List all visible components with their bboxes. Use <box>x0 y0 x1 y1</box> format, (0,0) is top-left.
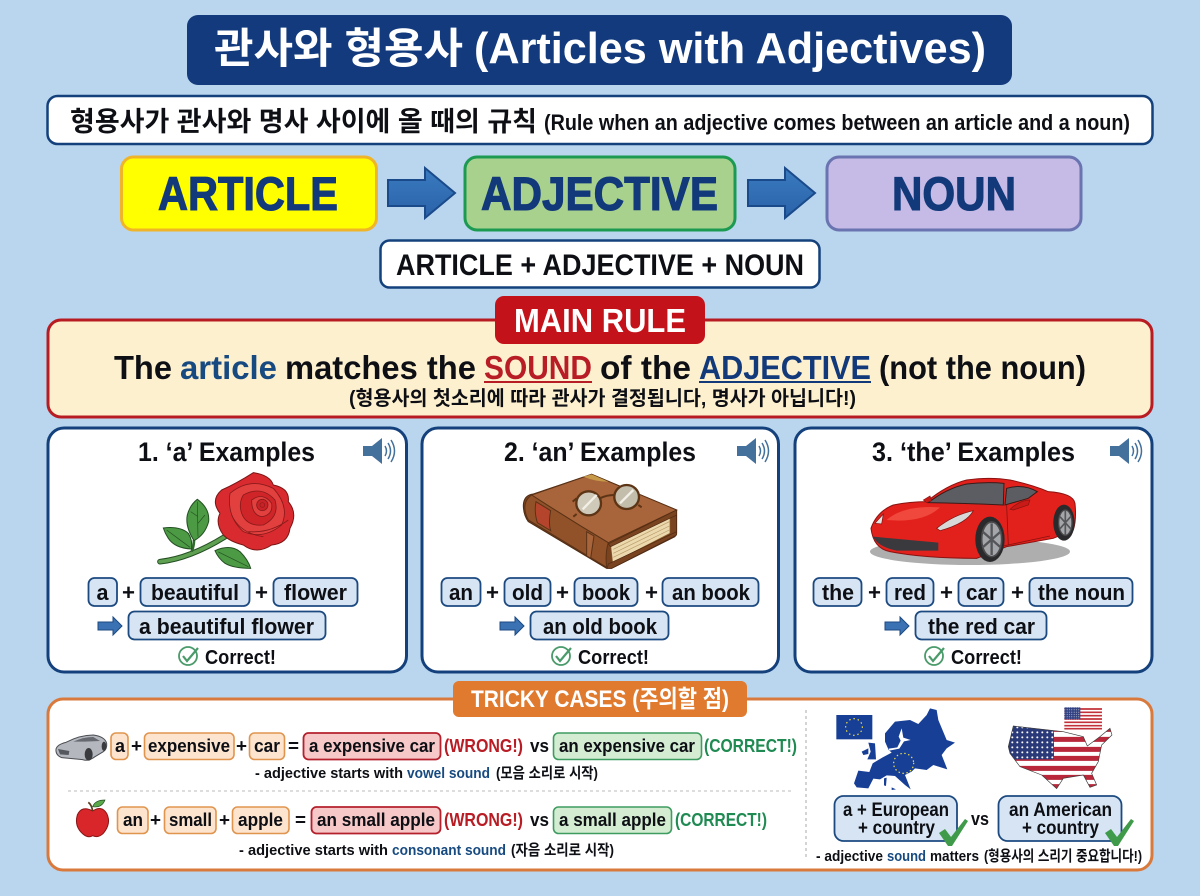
note row 1: vowel sound <box>407 765 490 782</box>
equation pills: red <box>894 580 926 605</box>
flow diagram: article adjective noun <box>122 157 1081 230</box>
panel: a examples <box>48 428 406 672</box>
equation pills: + <box>486 580 499 605</box>
note: sound matters: (형용사의 스리기 중요합니다!) <box>984 848 1142 865</box>
example row 1: + <box>236 736 247 756</box>
equation pills: + <box>1011 580 1024 605</box>
icon: speaker <box>1110 438 1142 464</box>
box: an American country <box>998 796 1122 841</box>
example row 2: apple <box>238 810 283 830</box>
article box <box>122 157 376 230</box>
subtitle: rule description: (Rule when an adjective comes between an article and a noun) <box>544 110 1130 135</box>
equation pills: the noun <box>1038 580 1125 605</box>
heading: 3. ‘the’ Examples <box>872 437 1075 467</box>
subtitle: rule description <box>48 96 1152 144</box>
adjective box <box>465 157 735 230</box>
main rule sentence: SOUND <box>484 349 592 386</box>
example row 2: a small apple <box>559 810 666 830</box>
example row 1: = <box>288 736 299 756</box>
correct <box>925 647 1022 669</box>
icon: red sports car <box>870 478 1076 565</box>
main rule sentence: article <box>180 349 277 386</box>
example row 1: (CORRECT!) <box>704 736 797 756</box>
result <box>885 612 1046 640</box>
note row 1: - adjective starts with <box>255 765 403 782</box>
example row 2: + <box>150 810 161 830</box>
vs: vs <box>971 809 989 829</box>
equation pills: flower <box>284 580 347 605</box>
title <box>187 15 1012 85</box>
example row 2: small <box>169 810 212 830</box>
noun box: NOUN <box>892 167 1016 220</box>
icon: speaker <box>737 438 768 464</box>
icon: gray car <box>56 735 107 761</box>
equation pills: + <box>122 580 135 605</box>
icon: rose <box>160 473 294 568</box>
box: an American country: an American <box>1009 800 1112 821</box>
arrow: article to adjective <box>388 168 455 218</box>
arrow: adjective to noun <box>748 168 815 218</box>
icon: old book and glasses <box>523 474 677 568</box>
note row 1 <box>255 765 598 782</box>
icon: EU flag and Europe map <box>836 708 955 790</box>
article box: ARTICLE <box>158 167 338 220</box>
box: a European country: + country <box>858 818 935 839</box>
adjective box: ADJECTIVE <box>481 167 718 220</box>
equation pills: + <box>940 580 953 605</box>
box: an American country: + country <box>1022 818 1099 839</box>
example row 1 <box>111 733 797 760</box>
main rule sentence: matches the <box>285 349 476 386</box>
equation pills: an book <box>672 580 751 605</box>
example row 1: + <box>131 736 142 756</box>
note: sound matters: matters <box>930 848 979 865</box>
main rule sentence: ADJECTIVE <box>699 349 871 386</box>
icon: green check <box>939 819 968 846</box>
main rule sentence: of the <box>600 349 691 386</box>
equation pills: old <box>512 580 543 605</box>
formula: ARTICLE + ADJECTIVE + NOUN <box>396 249 804 282</box>
panel: main rule <box>48 296 1152 417</box>
title: (Articles with Adjectives) <box>474 24 986 73</box>
example row 2: + <box>219 810 230 830</box>
noun box <box>827 157 1081 230</box>
note row 2: (자음 소리로 시작) <box>511 842 614 859</box>
example row 2 <box>118 807 767 834</box>
note row 1: (모음 소리로 시작) <box>496 765 598 782</box>
equation pills: + <box>556 580 569 605</box>
equation pills: + <box>255 580 268 605</box>
example row 2: vs <box>530 810 549 830</box>
correct: Correct! <box>205 647 276 669</box>
example row 2: an small apple <box>317 810 435 830</box>
correct: Correct! <box>578 647 649 669</box>
main rule Korean note: (형용사의 첫소리에 따라 관사가 결정됩니다, 명사가 아닙니다!) <box>349 387 856 410</box>
equation pills: a <box>96 580 109 605</box>
example row 1: expensive <box>148 736 230 756</box>
note: sound matters: sound <box>887 848 926 865</box>
example row 1: a expensive car <box>309 736 435 756</box>
icon: US flag and USA map <box>1007 707 1113 790</box>
equation pills: car <box>966 580 997 605</box>
correct <box>552 647 649 669</box>
correct: Correct! <box>951 647 1022 669</box>
result: a beautiful flower <box>139 614 314 639</box>
icon: green check <box>1105 819 1134 846</box>
equation pills: the <box>822 580 854 605</box>
heading: 1. ‘a’ Examples <box>138 437 315 467</box>
equation pills <box>88 578 358 606</box>
tricky cases tab <box>453 681 747 717</box>
note row 2: consonant sound <box>392 842 506 859</box>
title: 관사와 형용사 <box>214 25 463 72</box>
subtitle: rule description: 형용사가 관사와 명사 사이에 올 때의 규칙 <box>70 107 537 137</box>
equation pills: an <box>449 580 473 605</box>
example row 1: car <box>254 736 280 756</box>
main rule sentence: The <box>114 349 172 386</box>
equation pills: book <box>582 580 631 605</box>
example row 1: a <box>115 736 126 756</box>
equation pills: + <box>868 580 881 605</box>
example row 2: an <box>123 810 143 830</box>
panel: an examples <box>422 428 778 672</box>
result: an old book <box>543 614 658 639</box>
result <box>500 612 668 640</box>
equation pills: beautiful <box>151 580 239 605</box>
main rule tab: MAIN RULE <box>514 302 686 339</box>
example row 2: = <box>295 810 306 830</box>
formula <box>380 240 820 288</box>
example row 2: (CORRECT!) <box>675 810 767 830</box>
example row 1: an expensive car <box>559 736 695 756</box>
result: the red car <box>928 614 1035 639</box>
equation pills <box>814 578 1132 606</box>
tricky cases tab: TRICKY CASES (주의할 점) <box>471 686 729 713</box>
box: a European country <box>834 796 957 841</box>
main rule sentence <box>114 349 1086 386</box>
example row 2: (WRONG!) <box>444 810 523 830</box>
correct <box>179 647 276 669</box>
equation pills <box>442 578 758 606</box>
icon: speaker <box>363 438 394 464</box>
equation pills: + <box>645 580 658 605</box>
note: sound matters <box>816 848 1142 865</box>
main rule tab <box>495 296 705 344</box>
panel: the examples <box>795 428 1152 672</box>
heading: 2. ‘an’ Examples <box>504 437 696 467</box>
note row 2: - adjective starts with <box>239 842 388 859</box>
note row 2 <box>239 842 614 859</box>
icon: apple <box>76 800 109 837</box>
note: sound matters: - adjective <box>816 848 883 865</box>
box: a European country: a + European <box>843 800 949 821</box>
main rule sentence: (not the noun) <box>879 349 1086 386</box>
example row 1: vs <box>530 736 549 756</box>
example row 1: (WRONG!) <box>444 736 523 756</box>
panel: tricky cases <box>48 681 1152 870</box>
